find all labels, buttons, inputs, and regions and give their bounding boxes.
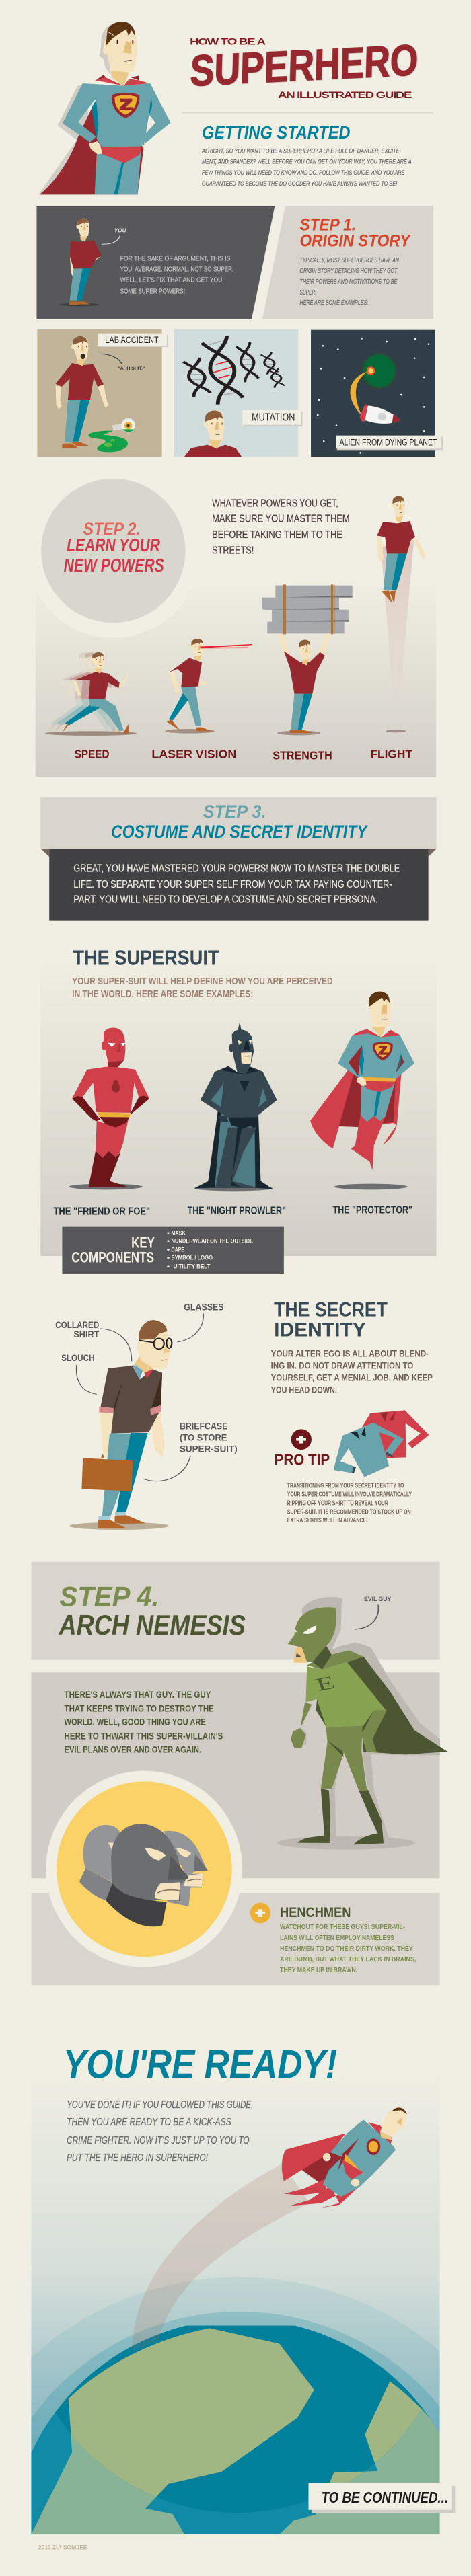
callout: to be continued: [308, 2483, 455, 2513]
label: strength: STRENGTH: [273, 748, 332, 763]
text: powers intro: WHATEVER POWERS YOU GET,: [212, 498, 338, 509]
text: you description: [120, 254, 233, 295]
illustration: henchmen portrait: [46, 1771, 242, 1967]
text: arch nemesis description: THAT KEEPS TRYING TO DESTROY THE: [65, 1703, 214, 1714]
illustration: dna strands: [183, 336, 285, 405]
heading: the secret identity: [274, 1299, 388, 1341]
label: alien from dying planet: [336, 436, 443, 450]
section: step 3 costume and secret identity: [40, 797, 437, 999]
panel: you: [36, 206, 275, 319]
section: step 1 origin story: [36, 206, 443, 457]
text: you're ready description: YOU'VE DONE IT! IF YOU FOLLOWED THIS GUIDE,: [67, 2099, 253, 2111]
heading: origin story: ORIGIN STORY: [300, 232, 412, 251]
text: secret identity: YOU HEAD DOWN.: [271, 1384, 337, 1395]
label: laser vision: LASER VISION: [151, 747, 236, 761]
heading: key components: COMPONENTS: [71, 1249, 154, 1265]
label: you: YOU: [114, 228, 126, 234]
heading: the supersuit: THE SUPERSUIT: [73, 946, 219, 969]
panel: powers background: [36, 576, 436, 777]
heading: step 3: STEP 3.: [203, 801, 266, 822]
callout: slouch: [61, 1352, 97, 1394]
callout: to be continued: TO BE CONTINUED...: [322, 2489, 448, 2506]
list: components: •: [167, 1247, 170, 1253]
illustration: shirts: [334, 1410, 429, 1477]
text: powers intro: [212, 498, 350, 556]
heading: getting started: GETTING STARTED: [202, 122, 351, 143]
heading: learn your new powers: [64, 535, 164, 576]
text: you're ready description: CRIME FIGHTER. NOW IT'S JUST UP TO YOU TO: [67, 2134, 250, 2146]
heading: henchmen: HENCHMEN: [280, 1904, 351, 1920]
callout: glasses: [177, 1302, 224, 1342]
heading: pro tip: PRO TIP: [275, 1450, 330, 1468]
label: lab accident: [98, 334, 168, 347]
label: friend or foe: THE "FRIEND OR FOE": [53, 1206, 150, 1217]
callout: briefcase: [143, 1421, 238, 1481]
text: arch nemesis description: EVIL PLANS OVER AND OVER AGAIN.: [65, 1744, 201, 1755]
illustration: superhero standing: [38, 22, 171, 194]
list: components: •: [167, 1255, 170, 1261]
callout: briefcase: BRIEFCASE: [180, 1421, 227, 1432]
list: components: SYMBOL / LOGO: [171, 1255, 213, 1261]
panel: supersuit background: [40, 946, 437, 1256]
callout: briefcase: SUPER-SUIT): [180, 1444, 238, 1454]
list: components: NUNDERWEAR ON THE OUTSIDE: [171, 1238, 253, 1245]
illustration: friend or foe: [69, 1028, 149, 1189]
text: arch nemesis description: [65, 1689, 223, 1755]
heading: the secret identity: THE SECRET: [274, 1299, 388, 1321]
illustration: night prowler: [194, 1021, 277, 1191]
credit: 2013 ZIA SOMJEE: [38, 2544, 87, 2550]
section: finale: [31, 2099, 455, 2550]
text: powers intro: BEFORE TAKING THEM TO THE: [212, 529, 342, 540]
step 2 circle: [27, 465, 200, 638]
label: ahh shit: "AHH SHIT.": [118, 366, 145, 371]
text: you're ready description: [67, 2099, 253, 2164]
label: flight: FLIGHT: [370, 747, 412, 761]
text: powers intro: MAKE SURE YOU MASTER THEM: [212, 513, 350, 524]
flight trail: [132, 2164, 310, 2351]
panel: henchmen background: [31, 1893, 440, 1985]
text: pro tip: EXTRA SHIRTS WELL IN ADVANCE!: [287, 1517, 367, 1524]
illustration: villain: [277, 1597, 447, 1850]
section: step 2 learn your new powers: [27, 465, 436, 777]
text: origin description: [300, 257, 399, 307]
label: protector: THE "PROTECTOR": [333, 1204, 412, 1216]
text: you description: SOME SUPER POWERS!: [120, 287, 185, 295]
list: components: [167, 1230, 253, 1270]
text: arch nemesis description: WORLD. WELL, GOOD THING YOU ARE: [65, 1717, 206, 1727]
heading: arch nemesis: ARCH NEMESIS: [58, 1610, 246, 1641]
panel: step 4 body background: [31, 1672, 440, 1878]
text: powers intro: STREETS!: [212, 545, 254, 556]
text: you description: YOU. AVERAGE. NORMAL. NOT SO SUPER.: [120, 265, 233, 273]
panel: step 4 heading background: [31, 1562, 440, 1660]
section: the secret identity: [55, 1299, 433, 1530]
icon: henchmen plus: [250, 1903, 270, 1923]
illustration: person bust: [184, 411, 242, 457]
text: origin description: HERE ARE SOME EXAMPLES:: [300, 299, 368, 307]
header divider: [182, 112, 433, 114]
callout: slouch: SLOUCH: [61, 1352, 95, 1363]
panel: key components: [62, 1227, 284, 1274]
text: arch nemesis description: HERE TO THWART THIS SUPER-VILLAIN'S: [65, 1731, 223, 1742]
heading: you're ready: YOU'RE READY!: [63, 2041, 337, 2087]
text: you're ready description: THEN YOU ARE READY TO BE A KICK-ASS: [67, 2117, 231, 2128]
label: mutation: MUTATION: [252, 412, 295, 423]
text: henchmen: [280, 1923, 416, 1974]
illustration: laser vision: [166, 639, 252, 734]
heading: step 2: STEP 2.: [83, 520, 141, 539]
illustration: flying superhero: [282, 2107, 407, 2208]
text: henchmen: WATCHOUT FOR THESE GUYS! SUPER-VIL-: [280, 1923, 405, 1931]
illustration: average person: [59, 219, 102, 306]
panel: alien from dying planet: [311, 330, 443, 457]
text: arch nemesis description: THERE'S ALWAYS THAT GUY. THE GUY: [65, 1689, 211, 1700]
label: speed: SPEED: [75, 747, 110, 761]
text: origin description: SUPER!: [300, 289, 317, 297]
list: components: •: [167, 1238, 170, 1245]
illustration: strength: [262, 584, 353, 735]
title: an illustrated guide: AN ILLUSTRATED GUIDE: [278, 89, 412, 100]
illustration: alter ego: [69, 1320, 172, 1530]
text: you're ready description: PUT THE THE HERO IN SUPERHERO!: [67, 2152, 208, 2164]
section: step 4 arch nemesis: [58, 1581, 447, 1850]
callout: evil guy: EVIL GUY: [364, 1596, 392, 1603]
emblem: villain e: E: [313, 1672, 338, 1695]
callout: collared shirt: COLLARED: [55, 1319, 99, 1330]
illustration: planet and rocket: [351, 354, 402, 424]
illustration: flight: [377, 496, 426, 732]
heading: learn your new powers: NEW POWERS: [64, 555, 164, 576]
heading: step 4: STEP 4.: [59, 1581, 159, 1612]
panel: mutation: [174, 329, 303, 457]
list: components: CAPE: [171, 1247, 184, 1253]
text: secret identity: [271, 1348, 433, 1395]
callout: briefcase: (TO STORE: [180, 1432, 227, 1443]
callout: collared shirt: [55, 1319, 132, 1361]
text: pro tip: [287, 1483, 412, 1524]
callout: glasses: GLASSES: [184, 1302, 224, 1313]
illustration: protector: [310, 991, 414, 1189]
label: lab accident: LAB ACCIDENT: [105, 334, 159, 345]
text: supersuit intro: IN THE WORLD. HERE ARE SOME EXAMPLES:: [72, 988, 253, 999]
text: supersuit intro: [72, 975, 333, 999]
label: mutation: [242, 410, 303, 426]
list: components: MASK: [171, 1230, 186, 1237]
list: components: •: [167, 1263, 170, 1270]
list: components: UITILITY BELT: [174, 1263, 211, 1270]
panel: origin story heading: [262, 206, 433, 319]
banner: step 3: [40, 797, 437, 857]
heading: key components: KEY: [131, 1234, 155, 1251]
section: header and getting started: [38, 22, 433, 194]
heading: key components: [71, 1234, 155, 1265]
section: henchmen and you're ready: [46, 1771, 416, 1974]
heading: step 1: STEP 1.: [300, 215, 356, 234]
heading: the secret identity: IDENTITY: [274, 1319, 366, 1341]
illustration: person with spilled flask: [56, 336, 135, 452]
panel: you're ready background: [31, 2056, 440, 2534]
list: components: •: [167, 1230, 170, 1237]
text: henchmen: LAINS WILL OFTEN EMPLOY NAMELESS: [280, 1934, 394, 1942]
panel: step 3 text: [49, 849, 429, 921]
heading: learn your new powers: LEARN YOUR: [67, 535, 160, 555]
text: you description: FOR THE SAKE OF ARGUMENT, THIS IS: [120, 254, 230, 262]
panel: lab accident: [37, 329, 168, 457]
callout: collared shirt: SHIRT: [73, 1329, 99, 1339]
text: you description: WELL, LET'S FIX THAT AND GET YOU: [120, 276, 222, 284]
illustration: speed: [45, 652, 137, 736]
text: intro: [201, 148, 412, 188]
text: henchmen: THEY MAKE UP IN BRAWN.: [280, 1966, 357, 1974]
section: supersuit examples: [53, 991, 414, 1274]
icon: pro tip plus: [291, 1429, 312, 1450]
title: how to be a: HOW TO BE A: [190, 36, 266, 47]
label: night prowler: THE "NIGHT PROWLER": [188, 1205, 286, 1216]
callout: evil guy: [355, 1596, 392, 1629]
illustration: earth: [31, 2277, 440, 2534]
